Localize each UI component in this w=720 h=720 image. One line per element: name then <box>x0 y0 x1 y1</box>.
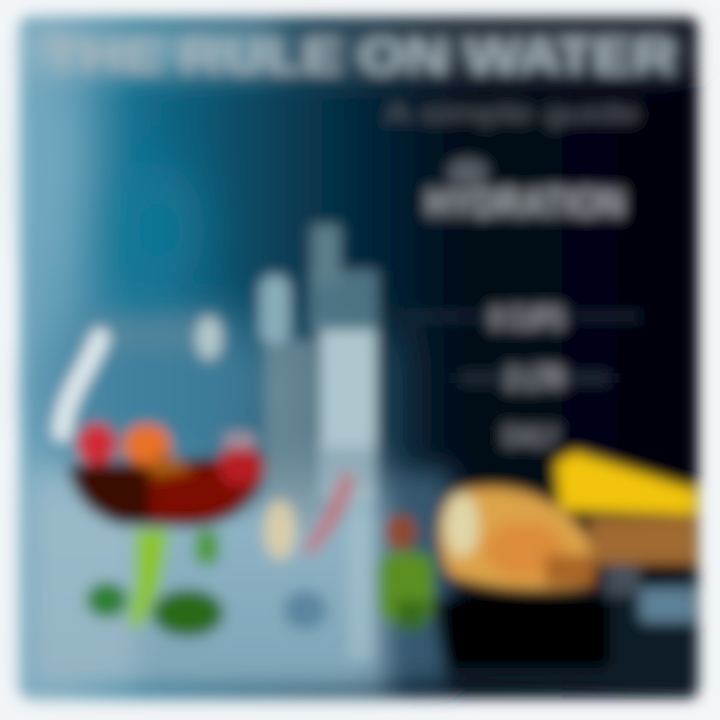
shadow at glass base <box>283 590 327 630</box>
icon: water glass <box>260 225 378 660</box>
heading: hydrate <box>426 159 624 225</box>
pitcher spout <box>196 316 222 360</box>
list item: second: 2 LTR <box>506 360 564 396</box>
icon: garnish by plate <box>378 514 434 630</box>
strawberry slice in glass <box>305 470 356 558</box>
pitcher handle <box>62 338 100 432</box>
list item: second <box>460 360 610 396</box>
dark bowl <box>430 570 697 692</box>
icon: water pitcher with fruit <box>62 316 265 527</box>
panel: mid-left blue haze <box>40 300 400 480</box>
orange fruit <box>123 424 171 466</box>
lemon slice in glass <box>264 500 296 560</box>
list item: first: 8 CUPS <box>490 300 564 336</box>
heading: hydrate: HYDRATION <box>426 181 624 225</box>
pitcher body haze <box>85 322 220 344</box>
toast below lemon <box>590 518 695 564</box>
title: THE RULE ON WATER <box>44 28 676 84</box>
blue napkin <box>640 588 694 622</box>
list item: first <box>410 300 642 336</box>
drink dark liquid <box>68 455 265 527</box>
subtitle: A simple guide <box>385 98 640 128</box>
glass body <box>260 225 378 660</box>
red fruit right <box>218 446 262 486</box>
icon: plate of food <box>430 452 697 692</box>
panel: table surface <box>26 440 452 692</box>
lemon wedge <box>556 452 695 515</box>
bread <box>440 487 595 589</box>
panel: title band haze <box>26 24 690 76</box>
list item: third: DAILY <box>503 420 559 453</box>
icon: mint leaves <box>86 530 224 637</box>
panel: teal glow <box>33 60 205 300</box>
red fruit <box>77 423 117 465</box>
